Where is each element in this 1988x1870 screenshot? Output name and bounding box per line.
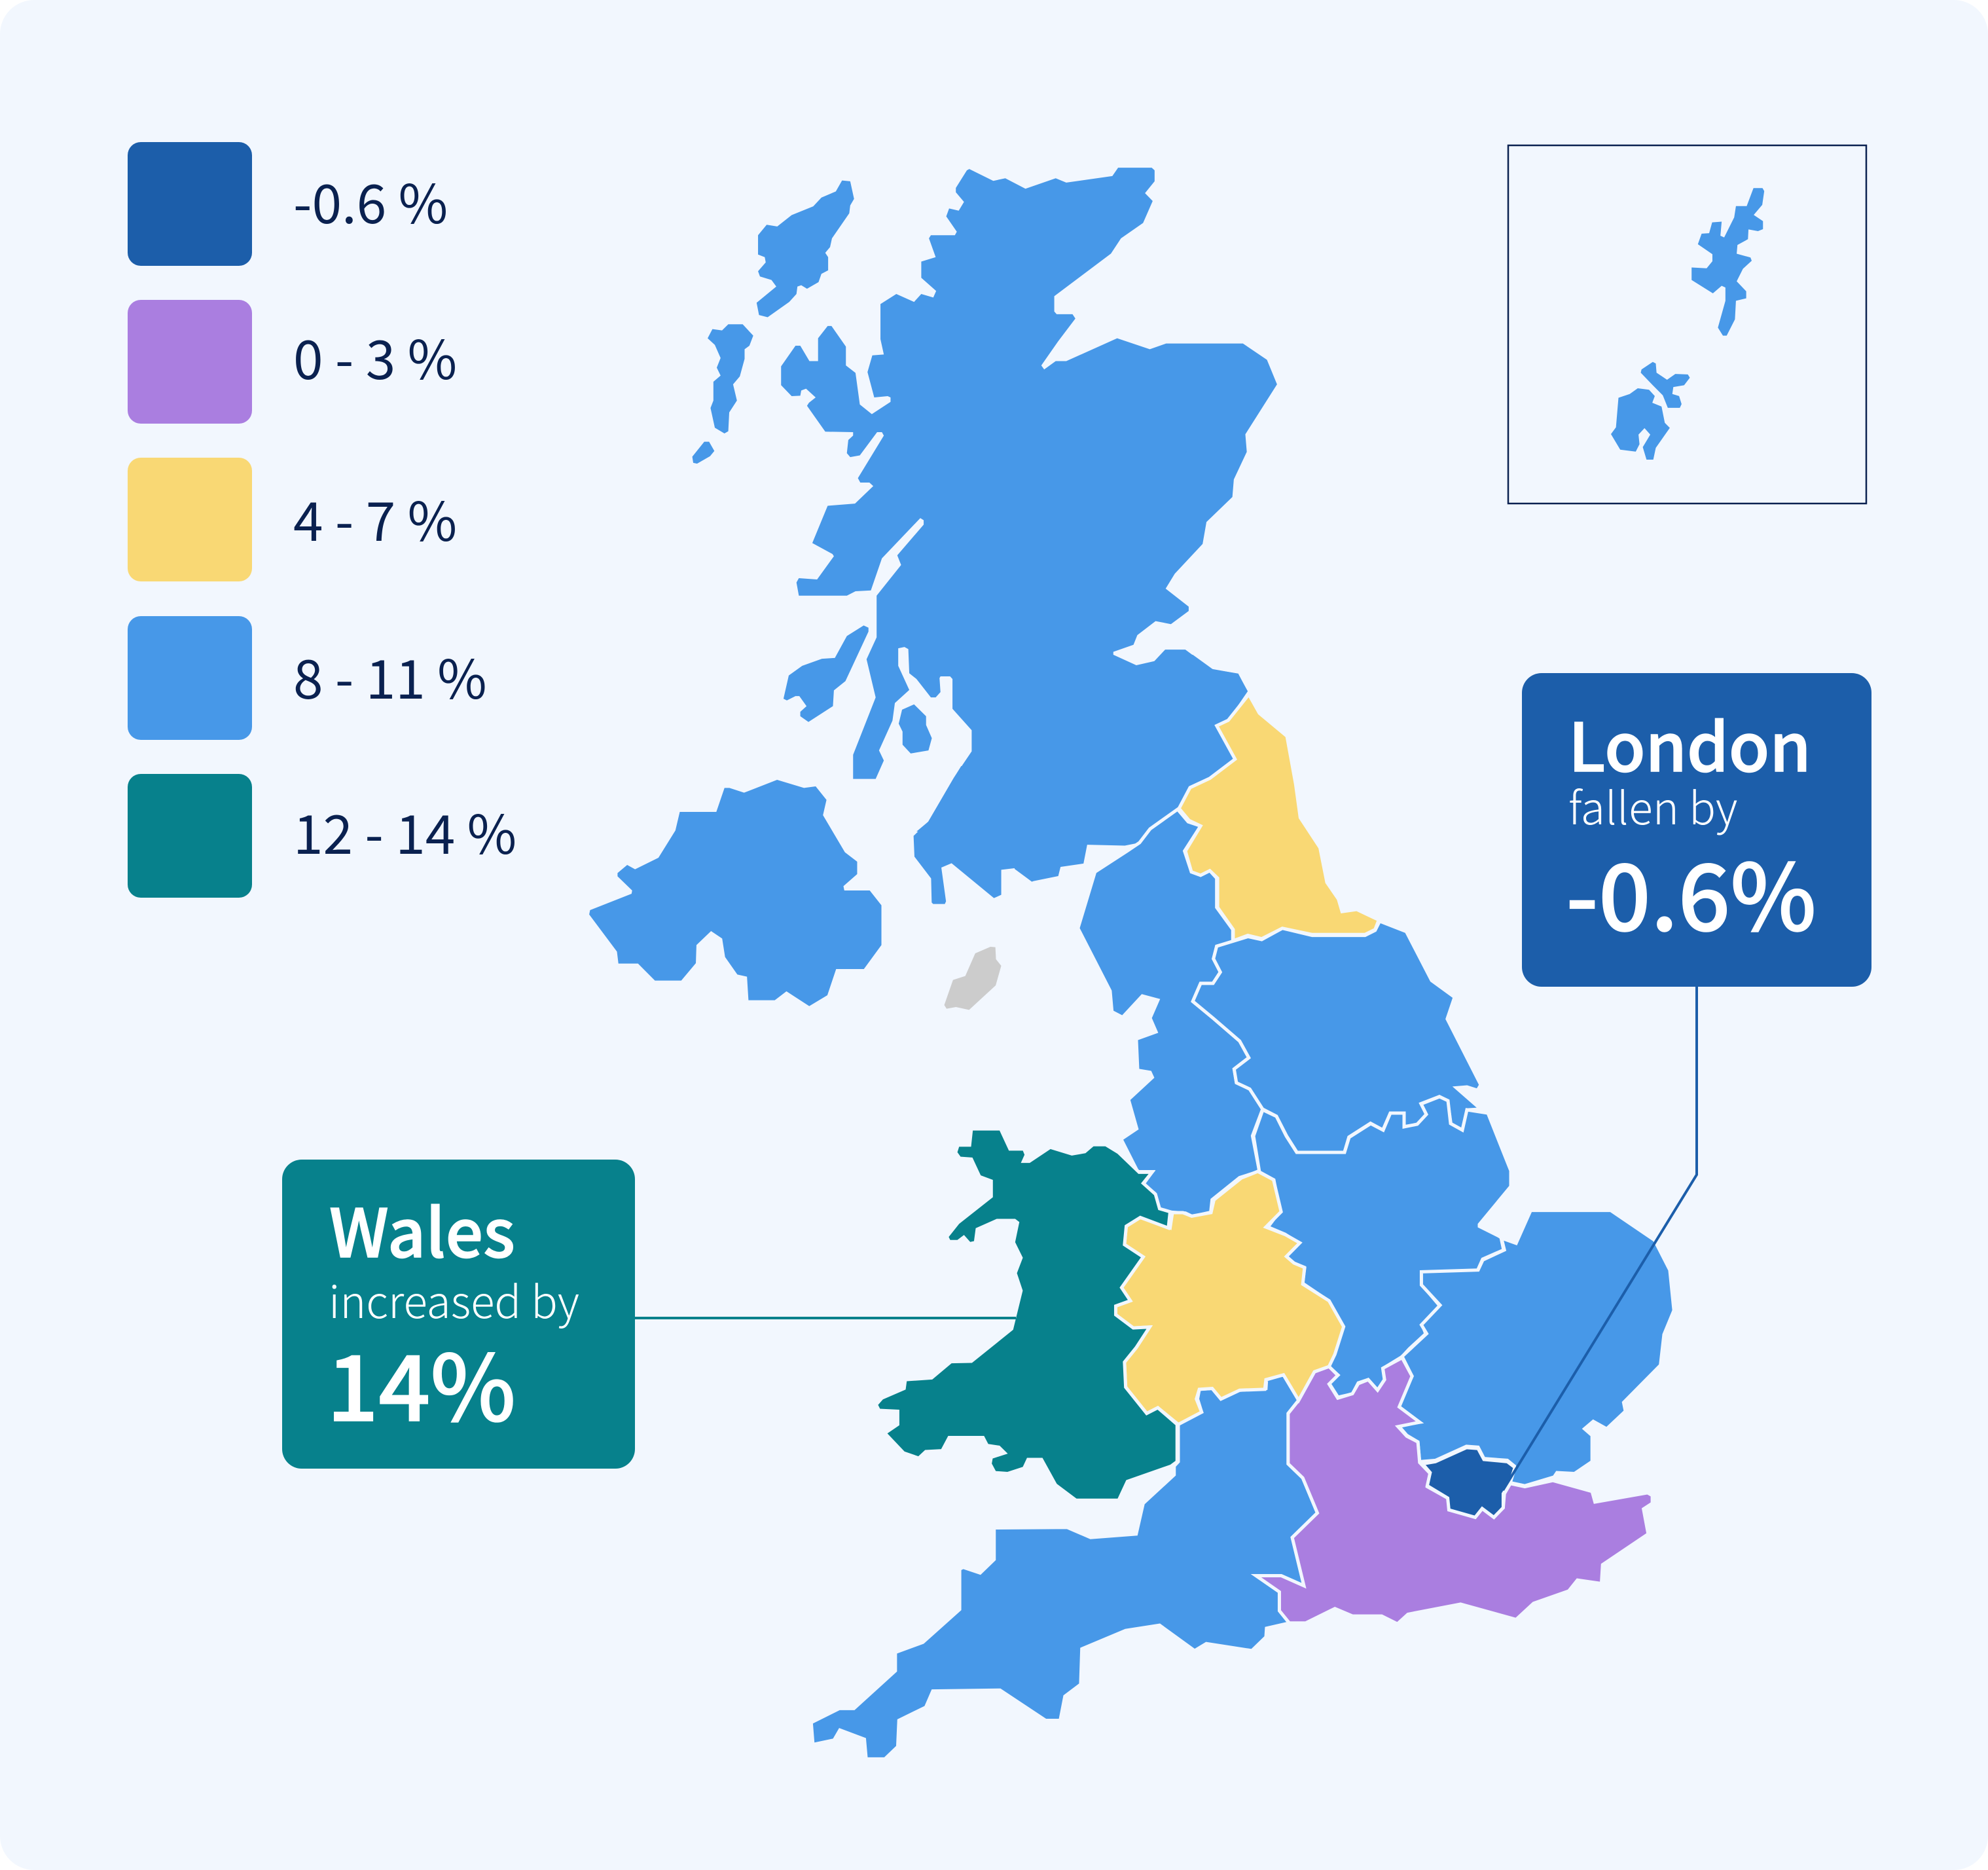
inset: Orkney and Shetland [1508,145,1866,504]
callout title: Wales [329,1181,515,1277]
map: North East England [1179,695,1379,941]
inset frame [1508,145,1866,504]
legend swatch: 8 - 11 % [128,616,252,740]
inset islands [1611,188,1764,460]
connector: Wales callout to Wales [634,1317,1016,1319]
map: London [1422,1448,1515,1517]
map: South East England [1256,1358,1652,1624]
legend label: 4 - 7 %: 4 - 7 % [293,479,457,557]
map: North West England [1078,809,1263,1217]
legend swatch: -0.6 % [128,142,252,266]
legend swatch: 0 - 3 % [128,300,252,424]
legend label: 0 - 3 %: 0 - 3 % [293,317,457,395]
map: Wales [876,1129,1177,1500]
map: Yorkshire and the Humber [1193,921,1481,1152]
map: South West England [811,1375,1318,1759]
map: West Midlands [1115,1171,1344,1424]
legend label: 8 - 11 %: 8 - 11 % [293,636,487,714]
callout: Wales [282,1160,635,1469]
callout box [282,1160,635,1469]
map: Northern Ireland [589,780,882,1006]
callout box [1522,673,1871,987]
legend label: -0.6 %: -0.6 % [293,161,448,239]
map: East of England [1398,1211,1674,1486]
map: Scotland [693,168,1277,904]
callout value: 14% [327,1316,516,1448]
legend swatch: 12 - 14 % [128,774,252,898]
callout subtitle: increased by [329,1268,579,1331]
callout: London [1522,673,1871,987]
map: Isle of Man [945,947,1002,1010]
callout value: -0.6% [1566,825,1816,957]
legend label: 12 - 14 %: 12 - 14 % [293,792,516,870]
map: East Midlands [1254,1097,1511,1397]
connector: London callout to London [1503,985,1697,1490]
legend [128,142,516,898]
callout subtitle: fallen by [1568,773,1737,837]
callout title: London [1568,695,1811,791]
legend swatch: 4 - 7 % [128,458,252,581]
